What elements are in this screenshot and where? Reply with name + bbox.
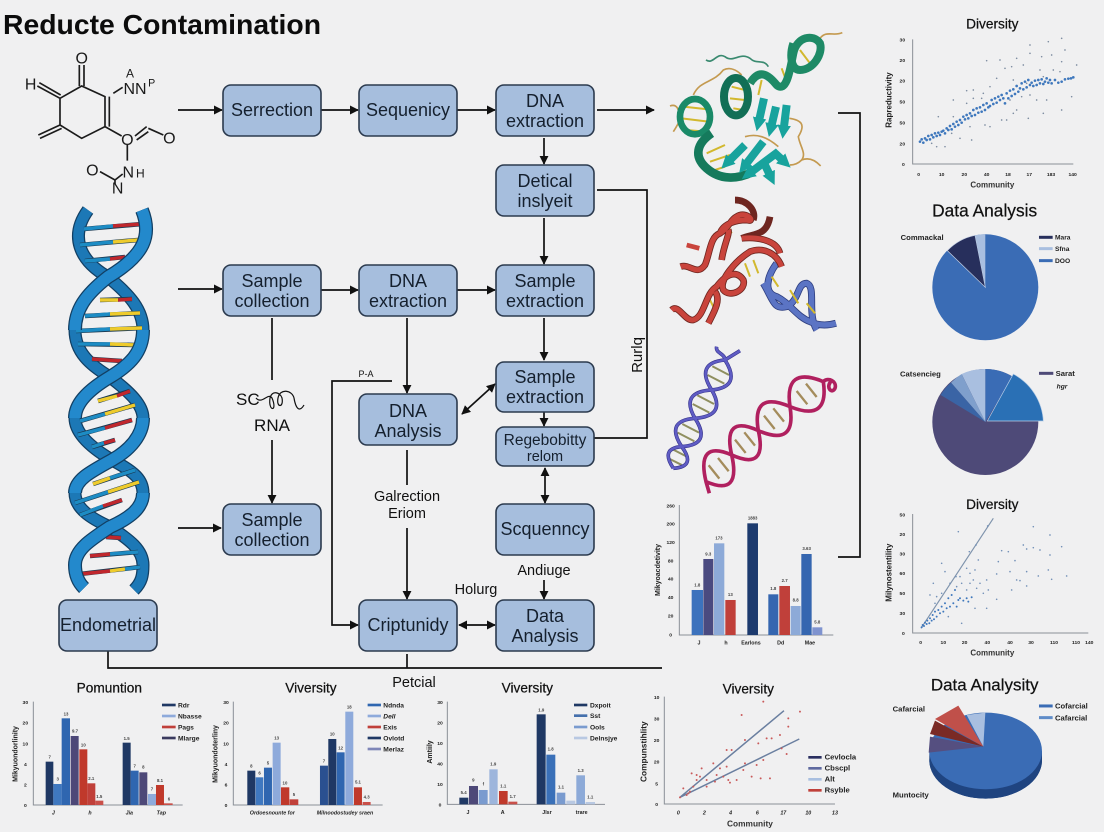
chart: Viversity scatter bottom: 17 (780, 811, 787, 817)
icon: chemical structure: H (25, 76, 36, 93)
box: Sample collection lower (223, 504, 321, 555)
chart: Diversity scatter lower right: Diversity (966, 497, 1019, 512)
icon: chemical structure: O (86, 163, 99, 180)
chart: Diversity scatter top right: 40 (984, 172, 990, 178)
label: SC RNA squiggle (236, 390, 304, 435)
chart: Viversity scatter bottom: 20 (654, 760, 660, 766)
chart: Diversity scatter lower right: 40 (985, 640, 990, 646)
bar chart: Viversity two: 10 (437, 741, 443, 747)
chart: Diversity scatter lower right: 0 (919, 640, 922, 646)
chart: Viversity scatter bottom: 5 (655, 781, 658, 787)
bar chart: center: h (724, 641, 728, 647)
bar chart: Viversity one: 5 (267, 761, 270, 766)
bar chart: Pomuntion: 10 (23, 741, 28, 747)
bar chart: Viversity two: Sst (590, 713, 601, 720)
chart: Diversity scatter top right: 18 (1005, 172, 1011, 178)
box: Sample collection middle: Sample (241, 271, 303, 291)
bar chart: Viversity two: Ools (590, 724, 605, 731)
box: Sample extraction upper: extraction (506, 291, 584, 311)
box: Detical insylet (496, 165, 594, 216)
chart: Diversity scatter lower right: 110 (1050, 640, 1058, 646)
bar chart: Viversity one (212, 681, 405, 816)
bar chart: Pomuntion: 9.7 (72, 728, 79, 733)
bar chart: center: 2.7 (782, 578, 788, 583)
chart: Viversity scatter bottom: 13 (832, 811, 838, 817)
bar chart: center: Mae (805, 641, 815, 647)
box: Endometrial (59, 600, 157, 651)
box: Endometrial: Endometrial (60, 615, 156, 635)
box: Criptunidy (359, 600, 457, 651)
box: Sample collection middle (223, 265, 321, 316)
bar chart: Viversity one: 30 (223, 700, 229, 706)
bar chart: Viversity one: 4.3 (364, 795, 370, 800)
box: Sample extraction lower: extraction (506, 387, 584, 407)
label: Andiuge: Andiuge (517, 563, 571, 579)
chart: Viversity scatter bottom: 30 (654, 717, 660, 723)
bar chart: Viversity two: 1.1 (558, 784, 565, 789)
chart: Diversity scatter top right: 0 (917, 172, 920, 178)
bar chart: Viversity one: 7 (323, 758, 326, 763)
chart: Data Analysity 3D pie (893, 676, 1088, 800)
bar chart: Pomuntion: 4 (24, 762, 27, 768)
box: Sequency: Sequenicy (366, 100, 450, 120)
bar chart: center: 8.8 (793, 598, 799, 603)
chart: Viversity scatter bottom: 10 (805, 811, 811, 817)
chart: pie two: Catsencieg (900, 370, 941, 379)
bar chart: Viversity one: 18 (347, 704, 352, 709)
box: Data Analysis (496, 600, 594, 651)
bar chart: center: J (698, 641, 701, 647)
chart: Viversity scatter bottom: 6 (756, 811, 759, 817)
chart: Diversity scatter lower right: 10 (941, 640, 946, 646)
bar chart: Viversity one: 6 (225, 783, 228, 789)
chart: Diversity scatter lower right (884, 497, 1094, 657)
box: Criptunidy: Criptunidy (367, 615, 449, 635)
chart: Viversity scatter bottom: Cbscpl (825, 764, 850, 773)
bar chart: center: 80 (668, 558, 674, 564)
chart: Diversity scatter top right: 20 (962, 172, 967, 178)
bar chart: Pomuntion: Tap (157, 810, 167, 816)
bar chart: center: 5.8 (814, 619, 821, 624)
bar chart: center: 40 (668, 595, 674, 601)
box: Regebobitty retom (496, 427, 594, 466)
chart: Viversity scatter bottom: 10 (654, 695, 660, 701)
chart: Diversity scatter top right: 50 (900, 120, 905, 126)
box: Data Analysis: Analysis (511, 626, 579, 646)
chart: Diversity scatter top right: 30 (900, 37, 905, 43)
bar chart: Pomuntion: 20 (23, 721, 28, 727)
bar chart: Viversity two: trare (576, 810, 588, 816)
box: Sample collection lower: collection (234, 530, 310, 550)
icon: chemical structure (25, 50, 176, 197)
chart: Diversity scatter lower right: 50 (900, 591, 905, 597)
box: Sequency (359, 85, 457, 136)
chart: Data Analysis pie one: Sfna (1055, 246, 1070, 253)
box: Sample extraction lower (496, 362, 594, 412)
chart: Viversity scatter bottom: 0 (677, 811, 680, 817)
chart: Diversity scatter lower right: 30 (900, 552, 905, 558)
bar chart: Pomuntion: Pags (178, 724, 194, 731)
icon: chemical structure: NN (123, 81, 147, 98)
box: Detical insylet: Detical (517, 171, 573, 191)
flow connectors (108, 110, 860, 668)
bar chart: Viversity one: 12 (338, 745, 344, 750)
bar chart: Pomuntion: 10 (81, 742, 86, 747)
chart: Diversity scatter top right: 17 (1027, 172, 1032, 178)
chart: Diversity scatter lower right: 20 (900, 532, 905, 538)
bar chart: Viversity two: Viversity (502, 681, 553, 696)
chart: Diversity scatter lower right: 30 (900, 611, 905, 617)
bar chart: Viversity two: 20 (437, 720, 443, 726)
chart: Diversity scatter lower right: 60 (900, 571, 905, 577)
label: Rurlg rotated: Rurlq (629, 337, 646, 373)
label: Galrection Eriom: Galrection (374, 489, 440, 505)
label: Galrection Eriom (374, 489, 440, 522)
bar chart: center: 1.8 (770, 586, 777, 591)
bar chart: Viversity two: 1.9 (538, 708, 545, 713)
bar chart: Viversity one: 6 (258, 770, 261, 775)
bar chart: Pomuntion: 7 (133, 763, 136, 768)
chart: Data Analysity 3D pie: Cofarcial (1055, 702, 1088, 711)
box: Regebobitty retom: relom (527, 449, 563, 465)
icon: chemical structure: O (121, 132, 134, 149)
box: Scquenncy: Scquenncy (500, 519, 590, 539)
chart: Data Analysis pie one: Mara (1055, 235, 1071, 242)
bar chart: Viversity one: 10 (330, 732, 335, 737)
chart: Viversity scatter bottom: 0 (655, 802, 658, 808)
bar chart: Viversity one: Ovlotd (383, 735, 404, 742)
bar chart: Viversity one: Mikyuondoterliny (212, 725, 219, 783)
axis label: Amtiily: Amtiily (427, 740, 434, 764)
chart: Diversity scatter top right: 20 (900, 141, 905, 147)
bar chart: center: 260 (666, 503, 675, 509)
icon: red and blue protein ribbon (672, 200, 836, 330)
bar chart: Viversity two: 10 (437, 782, 443, 788)
chart: Diversity scatter lower right: Community (970, 648, 1015, 657)
bar chart: Pomuntion: 2 (24, 783, 27, 789)
bar chart: center: 3.63 (802, 546, 811, 551)
chart: Data Analysity 3D pie: Cafarcial (893, 705, 925, 714)
box: DNA extraction top (496, 85, 594, 136)
bar chart: center: 120 (666, 540, 675, 546)
bar chart: Pomuntion: 30 (23, 700, 28, 706)
bar chart: Pomuntion: Pomuntion (77, 681, 142, 696)
icon: chemical structure: H (136, 166, 145, 180)
icon: DNA double helix (75, 210, 146, 590)
chart: Viversity scatter bottom: Community (727, 819, 773, 829)
bar chart: Pomuntion: 1.5 (124, 736, 130, 741)
bar chart: Viversity two: 1.8 (548, 747, 554, 752)
chart: pie two: Sarat (1056, 369, 1075, 378)
bar chart: Pomuntion: Jia (126, 810, 133, 816)
chart: Viversity scatter bottom: 4 (728, 811, 732, 817)
bar chart: Pomuntion: Mlarge (178, 735, 200, 742)
box: Regebobitty retom: Regebobitty (504, 432, 587, 449)
icon: green protein ribbon (670, 33, 842, 178)
label: small P-A: P-A (358, 369, 374, 379)
bar chart: Viversity two (437, 681, 618, 816)
bar chart: Pomuntion: 8 (142, 765, 145, 770)
bar chart: Pomuntion: 7 (48, 755, 51, 760)
box: Detical insylet: inslyeit (517, 191, 573, 211)
chart: Data Analysity 3D pie: Cafarcial (1055, 713, 1087, 722)
chart: Diversity scatter top right: Rapreductivity (884, 72, 893, 128)
label: Holurg: Holurg (455, 582, 497, 598)
bar chart: Pomuntion: 13 (64, 711, 69, 716)
chart: Diversity scatter lower right: 50 (900, 513, 905, 519)
chart: Diversity scatter top right: 183 (1047, 172, 1055, 178)
bar chart: center: Dd (777, 641, 784, 647)
box: Data Analysis: Data (526, 606, 565, 626)
bar chart: center: 1883 (748, 515, 758, 520)
bar chart: Viversity one: Ordoesnounte for (250, 810, 296, 816)
bar chart: Viversity two: Dxpoit (590, 702, 611, 709)
icon: chemical structure: O (75, 50, 88, 67)
box: DNA extraction middle (359, 265, 457, 316)
bar chart: Viversity two: 5.4 (461, 790, 467, 795)
bar chart: Viversity one: 13 (274, 735, 280, 740)
bar chart: Pomuntion: Nbasse (178, 713, 202, 720)
bar chart: Viversity one: 0 (225, 803, 228, 809)
chart: Diversity scatter top right: 10 (939, 172, 945, 178)
bar chart: Viversity one: Ndnda (383, 702, 404, 709)
bar chart: Viversity one: 10 (283, 780, 288, 785)
bar chart: Viversity one: 5.1 (355, 780, 362, 785)
box: Sample collection lower: Sample (241, 510, 303, 530)
box: Scquenncy (496, 504, 594, 555)
bar chart: Viversity two: 1.1 (587, 794, 594, 799)
icon: purple and magenta DNA strands (668, 347, 835, 493)
box: Sample extraction upper: Sample (514, 271, 576, 291)
bar chart: Viversity two: 1.9 (490, 762, 497, 767)
bar chart: Viversity one: Exis (383, 724, 397, 731)
chart: Viversity scatter bottom: Alt (825, 775, 835, 784)
chart: Viversity scatter bottom: Cevlocla (825, 753, 857, 762)
bar chart: Pomuntion: J (52, 810, 56, 816)
box: DNA Analysis (359, 394, 457, 445)
bar chart: Pomuntion: Mikyuondorlinity (12, 726, 19, 782)
box: DNA Analysis: DNA (389, 401, 427, 421)
chart: Viversity scatter bottom: 20 (654, 738, 660, 744)
bar chart: center: 9.3 (705, 551, 712, 556)
icon: chemical structure: A (126, 66, 134, 80)
bar chart: Pomuntion: 2.1 (88, 776, 95, 781)
bar chart: center: 200 (666, 522, 675, 528)
bar chart: Viversity two: 0 (439, 802, 442, 808)
bar chart: Viversity one: Milnoodostudey sraen (317, 810, 374, 816)
bar chart: Pomuntion: 6 (168, 797, 171, 802)
bar chart: center: Mikyoacdetivity (655, 544, 662, 596)
chart: Data Analysity 3D pie: Muntocity (893, 791, 930, 800)
chart: Viversity scatter bottom (639, 681, 857, 829)
chart: Viversity scatter bottom: Rsyble (825, 786, 850, 795)
chart: Data Analysis pie one (901, 201, 1071, 340)
label: Galrection Eriom: Eriom (388, 506, 426, 522)
bar chart: Viversity one: 10 (223, 741, 229, 747)
bar chart: Viversity two: J (467, 810, 470, 816)
box: DNA extraction middle: DNA (389, 271, 427, 291)
box: DNA extraction top: extraction (506, 111, 584, 131)
bar chart: center: 20 (668, 614, 674, 620)
chart: Diversity scatter top right: Diversity (966, 16, 1019, 31)
box: DNA Analysis: Analysis (374, 421, 442, 441)
bar chart: center (655, 503, 833, 647)
bar chart: Viversity two: 1.3 (578, 768, 584, 773)
chart: Diversity scatter lower right: 110 (1072, 640, 1080, 646)
title: Reducte Contamination (3, 9, 321, 40)
chart: Diversity scatter lower right: 0 (902, 631, 905, 637)
bar chart: Viversity one: Dell (383, 713, 396, 720)
bar chart: Pomuntion: 7 (151, 786, 154, 791)
bar chart: Pomuntion: 8.1 (157, 778, 164, 783)
bar chart: Viversity one: 8 (250, 763, 253, 768)
chart: Viversity scatter bottom: 2 (702, 811, 706, 817)
bar chart: center: Earlons (741, 641, 761, 647)
icon: chemical structure: O (163, 130, 176, 147)
box: DNA extraction top: DNA (526, 91, 564, 111)
chart: Diversity scatter top right: 0 (902, 162, 905, 168)
box: DNA extraction middle: extraction (369, 291, 447, 311)
chart: Data Analysity 3D pie: Data Analysity (931, 676, 1039, 695)
chart: Diversity scatter top right: 140 (1068, 172, 1077, 178)
bar chart: Viversity two: 1.1 (500, 784, 507, 789)
bar chart: Viversity one: 20 (223, 721, 229, 727)
bar chart: center: 173 (715, 535, 723, 540)
chart: Data Analysis pie one: DOO (1055, 258, 1070, 265)
box: Sample collection middle: collection (234, 291, 310, 311)
box: Sample extraction upper (496, 265, 594, 316)
chart: Diversity scatter lower right: 140 (1085, 640, 1094, 646)
label: Petcial: Petcial (392, 675, 436, 691)
chart: Diversity scatter lower right: 30 (1028, 640, 1034, 646)
chart: Diversity scatter lower right: 20 (962, 640, 968, 646)
bar chart: Viversity two: A (501, 810, 505, 816)
bar chart: Pomuntion: 0 (24, 803, 27, 809)
label: SC RNA squiggle: RNA (254, 416, 291, 435)
bar chart: center: 1.8 (694, 583, 701, 588)
chart: Diversity scatter top right: 20 (900, 78, 905, 84)
bar chart: Viversity one: 5 (293, 792, 296, 797)
bar chart: Viversity one: Merlaz (383, 746, 405, 753)
bar chart: Viversity two: f (483, 782, 485, 787)
icon: chemical structure: P (148, 78, 155, 90)
box: Sample extraction lower: Sample (514, 367, 576, 387)
bar chart: Viversity two: 30 (437, 700, 443, 706)
chart: Viversity scatter bottom: Compunstihlity (639, 721, 649, 782)
chart: pie two (900, 369, 1075, 475)
bar chart: Viversity two: Delnsjye (590, 735, 618, 742)
bar chart: center: 40 (668, 577, 674, 583)
icon: chemical structure: N (112, 180, 123, 197)
chart: Diversity scatter lower right: 40 (1007, 640, 1013, 646)
chart: Data Analysis pie one: Data Analysis (932, 201, 1037, 221)
bar chart: center: 13 (728, 592, 733, 597)
bar chart: Viversity one: 4 (225, 762, 228, 768)
chart: Diversity scatter top right: Community (970, 181, 1015, 190)
box: Serrection (223, 85, 321, 136)
chart: Viversity scatter bottom: Viversity (723, 681, 774, 696)
chart: pie two: hgr (1057, 383, 1068, 390)
bar chart: Viversity two: 9 (472, 778, 475, 783)
bar chart: Pomuntion: 3 (56, 777, 59, 782)
bar chart: center: 0 (669, 633, 672, 639)
chart: Diversity scatter top right: 20 (900, 58, 905, 64)
bar chart: Pomuntion: 1.5 (96, 794, 103, 799)
label: SC RNA squiggle: SC (236, 390, 260, 409)
chart: Diversity scatter top right (884, 16, 1077, 190)
chart: Diversity scatter lower right: Milynostentility (884, 543, 893, 602)
bar chart: Pomuntion: h (88, 810, 92, 816)
bar chart: Pomuntion (12, 681, 202, 816)
bar chart: Viversity two: Jlsr (542, 810, 552, 816)
bar chart: Viversity two: 40 (437, 761, 443, 767)
chart: Diversity scatter top right: 50 (900, 99, 905, 105)
icon: chemical structure: N (123, 164, 134, 181)
bar chart: Viversity two: 1.7 (510, 794, 516, 799)
bar chart: Pomuntion: Rdr (178, 702, 190, 709)
chart: Data Analysis pie one: Commackal (901, 233, 944, 242)
box: Serrection: Serrection (231, 100, 313, 120)
bar chart: Viversity one: Viversity (285, 681, 337, 696)
